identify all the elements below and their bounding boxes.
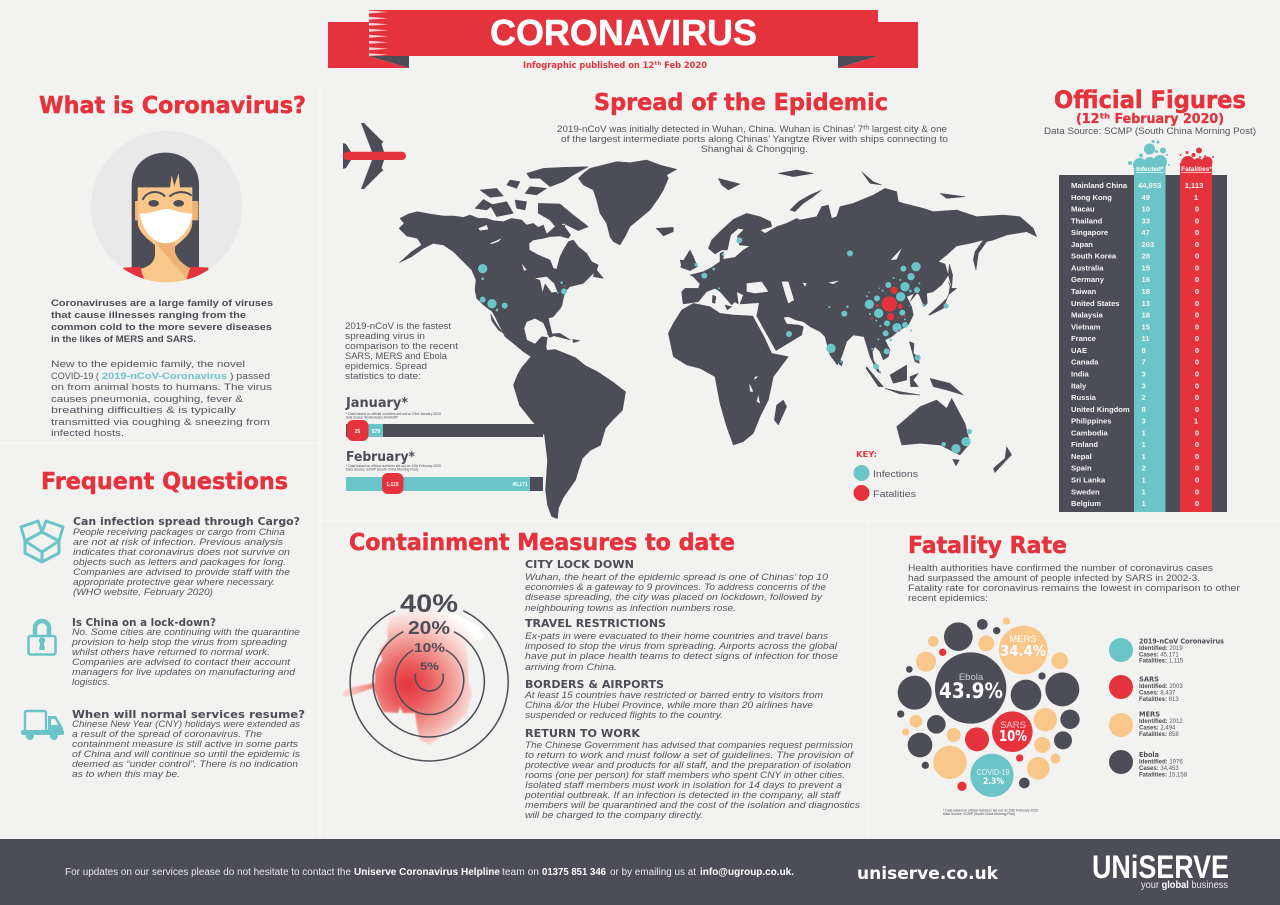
icon: padlock	[28, 621, 56, 654]
contact text	[65, 867, 794, 878]
table: figures by country: Macau	[1071, 205, 1095, 214]
table: figures by country: Mainland China	[1071, 181, 1128, 190]
panel: what is coronavirus	[39, 93, 306, 439]
table: figures by country: 8	[1142, 346, 1146, 355]
table: figures by country: 0	[1195, 240, 1199, 249]
text block: novel virus description: transmitted via coughing & sneezing from	[51, 417, 270, 428]
text block: fatality rate description: recent epidemics:	[908, 593, 988, 604]
heading: frequent questions: Frequent Questions	[41, 469, 288, 495]
table: figures by country: 0	[1195, 275, 1199, 284]
text block: fatality rate description	[908, 563, 1241, 604]
table: figures by country: 0	[1195, 464, 1199, 473]
bubbles: infections	[694, 237, 972, 453]
text block: fastest spreading virus: statistics to date:	[345, 371, 421, 382]
contact text: or by emailing us at	[610, 867, 696, 878]
table: figures by country: 0	[1195, 322, 1199, 331]
text block: bold introduction: that cause illnesses ranging from the	[51, 310, 246, 321]
table: figures by country: Spain	[1071, 464, 1092, 473]
legend: epidemics: Ebola	[1139, 751, 1159, 759]
text block: novel virus description: COVID-19 (	[51, 371, 100, 382]
text block: return to work: will be charged to the company directly.	[525, 810, 703, 821]
table: figures by country: 0	[1195, 381, 1199, 390]
table: figures by country: 15	[1142, 322, 1151, 331]
footer	[0, 839, 1280, 905]
subheading: date: (12ᵗʰ February 2020)	[1076, 112, 1224, 127]
question: lock-down: No. Some cities are continuing with the quarantine	[72, 627, 300, 638]
icon: delivery truck	[21, 711, 64, 740]
text block: bold introduction	[51, 298, 273, 345]
question: lock-down	[71, 617, 300, 688]
table: figures by country: Hong Kong	[1071, 193, 1112, 202]
chart: bubble cluster of fatality rates: * Data based on official numbers set out on 12th February 2020	[943, 808, 1038, 812]
text block: city lock down	[525, 559, 829, 614]
panel: fatality rate	[897, 533, 1241, 816]
table: figures by country: 0	[1195, 346, 1199, 355]
text block: return to work: to return to work and must follow a set of guidelines. The provision of	[525, 750, 854, 761]
table: figures by country: 8	[1142, 405, 1146, 414]
table: figures by country: 15	[1142, 264, 1151, 272]
legend: epidemics: Identified: 2012	[1139, 719, 1183, 725]
bar: february comparison: Data Source: SCMP (South China Morning Post)	[346, 468, 418, 472]
text block: bold introduction: common cold to the more severe diseases	[51, 322, 272, 333]
table: figures by country: Japan	[1071, 240, 1093, 249]
chart: bubble cluster of fatality rates	[897, 617, 1080, 816]
table: figures by country: 0	[1195, 393, 1199, 402]
table: figures by country: 0	[1195, 228, 1199, 237]
question: cargo: Can infection spread through Cargo?	[73, 516, 300, 528]
table: figures by country: 0	[1195, 358, 1199, 367]
table: figures by country: Canada	[1071, 358, 1099, 367]
table: figures by country: 3	[1142, 417, 1146, 426]
text block: return to work: The Chinese Government has advised that companies request permission	[525, 740, 853, 751]
chart: containment rings over china	[343, 590, 508, 761]
table: figures by country: 0	[1195, 370, 1199, 378]
chart: containment rings over china: 5%	[420, 661, 439, 673]
table: figures by country: 0	[1195, 287, 1199, 296]
text block: wuhan introduction: of the largest intermediate ports along Chinas’ Yangtze River with ships connecting to	[561, 134, 948, 145]
text block: fastest spreading virus: comparison to the recent	[345, 341, 458, 352]
chart: bubble cluster of fatality rates: Ebola	[959, 672, 984, 683]
table: figures by country: United Kingdom	[1071, 405, 1130, 414]
legend: epidemics: Cases: 34,453	[1139, 766, 1179, 772]
table: figures by country: Thailand	[1071, 216, 1103, 225]
table: figures by country: Philippines	[1071, 417, 1112, 426]
table: figures by country: UAE	[1071, 346, 1087, 355]
question: cargo: indicates that coronavirus does not survive on	[73, 547, 290, 558]
text block: return to work: protective wear and products for all staff, and the preparation of isolation	[524, 760, 851, 771]
question: lock-down: Is China on a lock-down?	[72, 617, 216, 629]
table: figures by country: 11	[1142, 334, 1150, 343]
text block: travel restrictions: Ex-pats in were evacuated to their home countries and travel bans	[525, 631, 828, 642]
bar: january comparison: 25	[355, 429, 360, 435]
chart: bubble cluster of fatality rates: Data Source: SCMP (South China Morning Post)	[943, 812, 1015, 816]
legend: epidemics: 2019-nCoV Coronavirus	[1139, 638, 1224, 646]
bar: january comparison: Data Source: Worldometers.info/SCMP	[346, 416, 398, 420]
table: figures by country: France	[1071, 334, 1096, 343]
text block: travel restrictions: have put in place health teams to detect signs of infection for those	[525, 651, 838, 662]
question: lock-down: whilst others have returned to normal work.	[72, 647, 270, 658]
logo: your global business	[1141, 880, 1228, 891]
table: figures by country: 3	[1142, 370, 1146, 378]
contact text: Uniserve Coronavirus Helpline	[354, 867, 500, 878]
heading: official figures: Official Figures	[1054, 86, 1246, 114]
bubbles: fatalities	[871, 287, 918, 358]
table: figures by country: 18	[1142, 311, 1150, 320]
table: figures by country: South Korea	[1071, 252, 1117, 261]
text block: borders and airports: At least 15 countries have restricted or barred entry to visitors from	[524, 690, 823, 701]
chart: containment rings over china: 10%	[414, 640, 446, 655]
table: figures by country: Singapore	[1071, 228, 1108, 237]
heading: containment measures: Containment Measures to date	[349, 530, 735, 556]
text block: return to work: RETURN TO WORK	[525, 728, 641, 740]
text block: wuhan introduction: 2019-nCoV was initially detected in Wuhan, China. Wuhan is Chinas’ 7ᵗʰ largest city & one	[557, 124, 947, 135]
illustration: woman wearing a mask	[91, 131, 242, 285]
text block: novel virus description: 2019-nCoV-Coronavirus	[102, 371, 227, 382]
table: figures by country: Sweden	[1071, 487, 1100, 496]
bar: february comparison: February*	[346, 450, 415, 465]
text block: novel virus description: on from animal hosts to humans. The virus	[51, 382, 272, 393]
panel: frequent questions	[21, 469, 305, 780]
table: figures by country: 2	[1142, 393, 1146, 402]
text block: city lock down: neighbouring towns as infection numbers rose.	[525, 603, 736, 614]
table: figures by country: 1	[1142, 499, 1146, 508]
table: figures by country: 47	[1142, 228, 1150, 237]
legend: epidemics: Fatalities: 858	[1139, 732, 1179, 738]
question: cargo: Companies are advised to provide staff with the	[73, 567, 290, 578]
table: figures by country: 0	[1195, 205, 1199, 214]
legend: epidemics: Identified: 2003	[1139, 684, 1183, 690]
legend: epidemics: Cases: 8,437	[1139, 690, 1176, 696]
heading: fatality rate: Fatality Rate	[908, 533, 1067, 559]
panel: containment measures	[343, 530, 860, 821]
text block: return to work: Isolated staff members must work in isolation for 14 days to prevent a	[525, 780, 842, 791]
table: figures by country: 33	[1142, 216, 1150, 225]
table: figures by country: Malaysia	[1071, 311, 1103, 320]
text block: travel restrictions: arriving from China.	[525, 662, 617, 673]
title banner	[328, 10, 918, 71]
table: figures by country: 1	[1142, 487, 1146, 496]
legend: epidemics: MERS	[1139, 710, 1160, 718]
question: cargo: appropriate protective gear where necessary.	[73, 577, 275, 588]
table: figures by country: Finland	[1071, 440, 1098, 449]
table: figures by country: 13	[1142, 299, 1150, 308]
table: figures by country: 16	[1142, 275, 1150, 284]
map key: Infections	[873, 469, 918, 480]
table: figures by country: 49	[1142, 193, 1150, 202]
table: figures by country: 0	[1195, 452, 1199, 461]
table: figures by country: Cambodia	[1071, 428, 1108, 437]
table: figures by country: Russia	[1071, 393, 1097, 402]
chart: bubble cluster of fatality rates: COVID-19	[976, 767, 1010, 777]
table: figures by country: 0	[1195, 405, 1199, 414]
table: figures by country: 10	[1142, 205, 1150, 214]
legend: epidemics: Identified: 2019	[1139, 646, 1183, 652]
icon: infected bubbles	[1128, 140, 1170, 172]
table: figures by country: United States	[1071, 299, 1120, 308]
table: figures by country: Australia	[1071, 264, 1104, 272]
text block: wuhan introduction: Shanghai & Chongqing.	[701, 144, 808, 155]
bar: january comparison: 579	[372, 429, 380, 435]
table: figures by country: 1	[1142, 452, 1146, 461]
table: figures by country: 44,653	[1138, 181, 1161, 190]
text block: return to work: potential outbreak. If an infection is detected in the company, all staff	[524, 790, 841, 801]
question: lock-down: managers for live updates on manufacturing and	[72, 667, 296, 678]
table: figures by country: Nepal	[1071, 452, 1092, 461]
map: north america and greenland	[399, 160, 677, 360]
text block: bold introduction: Coronaviruses are a large family of viruses	[51, 298, 273, 309]
text block: borders and airports	[524, 679, 823, 721]
text block: novel virus description: infected hosts.	[51, 428, 124, 439]
chart: bubble cluster of fatality rates: 10%	[999, 727, 1027, 745]
question: services resume: deemed as “under control”. There is no indication	[72, 759, 298, 770]
text block: travel restrictions: TRAVEL RESTRICTIONS	[525, 618, 666, 630]
text block: novel virus description	[51, 359, 272, 439]
text block: fatality rate description: Health authorities have confirmed the number of coronavirus cases	[908, 563, 1213, 574]
data source: Data Source: SCMP (South China Morning Post)	[1044, 126, 1256, 137]
bar: january comparison	[345, 396, 543, 441]
chart: containment rings over china: 20%	[408, 618, 450, 638]
table: figures by country: 0	[1195, 499, 1199, 508]
table: figures by country	[1059, 140, 1227, 512]
table: figures by country: Taiwan	[1071, 287, 1097, 296]
icon: airplane	[343, 123, 406, 189]
text block: novel virus description: ) passed	[230, 371, 270, 382]
table: figures by country: 0	[1195, 264, 1199, 272]
contact text: For updates on our services please do not hesitate to contact the	[65, 867, 351, 878]
text block: city lock down: disease spreading, the city was placed on lockdown, followed by	[525, 592, 823, 603]
table: figures by country: 0	[1195, 252, 1199, 261]
table: figures by country: Germany	[1071, 275, 1105, 284]
contact text: info@ugroup.co.uk.	[700, 867, 794, 878]
map key: KEY:	[856, 450, 877, 459]
bar: february comparison: 1,115	[386, 482, 399, 488]
text block: wuhan introduction	[557, 124, 948, 155]
bubbles: north america infections	[478, 264, 567, 311]
text block: city lock down: Wuhan, the heart of the epidemic spread is one of Chinas’ top 10	[525, 572, 829, 583]
text block: return to work: rooms (one per person) for staff members who spent CNY in other cities.	[525, 770, 845, 781]
text block: fastest spreading virus	[345, 321, 458, 382]
text block: city lock down: CITY LOCK DOWN	[525, 559, 634, 571]
text block: borders and airports: suspended or reduced flights to the country.	[525, 710, 723, 721]
legend: epidemics: Cases: 45,171	[1139, 652, 1179, 658]
text block: fastest spreading virus: 2019-nCoV is the fastest	[345, 321, 451, 332]
text block: bold introduction: in the likes of MERS and SARS.	[51, 334, 196, 345]
icon: fatality bubbles	[1180, 148, 1214, 170]
table: figures by country: 28	[1142, 252, 1150, 261]
legend: epidemics: Fatalities: 15,158	[1139, 772, 1188, 778]
chart: bubble cluster of fatality rates: MERS	[1009, 634, 1037, 645]
question: services resume: as to when this may be.	[72, 769, 180, 780]
table: figures by country: 1	[1142, 428, 1146, 437]
table: figures by country: Fatalities*	[1181, 166, 1212, 173]
bar: january comparison: * Data based on official numbers set out on 23rd January 2020	[346, 412, 441, 416]
bar: january comparison: January*	[345, 396, 408, 411]
text block: novel virus description: New to the epidemic family, the novel	[51, 359, 245, 370]
text block: novel virus description: causes pneumonia, coughing, fever &	[51, 394, 244, 405]
question: lock-down: logistics.	[72, 677, 110, 688]
bar: february comparison	[346, 450, 543, 494]
table: figures by country: Italy	[1071, 381, 1087, 390]
question: services resume: Chinese New Year (CNY) holidays were extended as	[72, 719, 300, 730]
contact text: team on	[502, 867, 539, 878]
text block: travel restrictions: imposed to stop the virus from spreading. Airports across the global	[525, 641, 838, 652]
table: figures by country: Sri Lanka	[1071, 476, 1106, 484]
world map	[399, 160, 1037, 518]
question: cargo: People receiving packages or cargo from China	[73, 527, 285, 538]
table: figures by country: 0	[1195, 299, 1199, 308]
table: figures by country: 3	[1142, 381, 1146, 390]
table: figures by country: Vietnam	[1071, 322, 1101, 331]
legend: epidemics: Cases: 2,494	[1139, 726, 1176, 732]
legend: epidemics: Fatalities: 1,115	[1139, 658, 1184, 664]
legend: epidemics: Identified: 1976	[1139, 760, 1183, 766]
question: lock-down: provision to help stop the virus from spreading	[71, 637, 288, 648]
heading: spread of the epidemic: Spread of the Epidemic	[594, 90, 888, 116]
question: lock-down: Companies are advised to contact their account	[72, 657, 290, 668]
text block: city lock down: economies & a gateway to 9 provinces. To address concerns of the	[525, 582, 826, 593]
chart: bubble cluster of fatality rates: 43.9%	[939, 679, 1003, 703]
title banner: CORONAVIRUS	[490, 12, 757, 53]
panel: spread of the epidemic	[343, 90, 1037, 518]
table: figures by country: 1	[1142, 476, 1146, 484]
question: services resume: When will normal services resume?	[72, 709, 305, 721]
chart: bubble cluster of fatality rates: 34.4%	[1000, 642, 1046, 660]
question: services resume	[72, 709, 305, 780]
panel: official figures	[1044, 86, 1256, 512]
text block: borders and airports: China &/or the Hubei Province, while more than 20 airlines have	[525, 700, 813, 711]
map: eurasia, africa and oceania	[656, 170, 1037, 473]
text block: return to work	[524, 728, 860, 821]
chart: bubble cluster of fatality rates: SARS	[1000, 720, 1026, 731]
table: figures by country: 7	[1142, 358, 1146, 367]
legend: epidemics	[1109, 638, 1224, 778]
map key: Fatalities	[873, 489, 916, 500]
table: figures by country: 1	[1194, 193, 1199, 202]
text block: novel virus description: breathing difficulties & is typically	[51, 405, 236, 416]
table: figures by country: India	[1071, 370, 1089, 378]
map key	[854, 450, 918, 501]
legend: epidemics: Fatalities: 813	[1139, 697, 1179, 703]
chart: bubble cluster of fatality rates: 2.3%	[983, 777, 1004, 787]
map: south america	[514, 350, 625, 518]
question: services resume: a result of the spread of coronavirus. The	[72, 729, 262, 740]
legend: epidemics: SARS	[1139, 676, 1159, 684]
question: services resume: of China and will continue so until the epidemic is	[72, 749, 300, 760]
table: figures by country: 0	[1195, 476, 1199, 484]
title banner: Infographic published on 12ᵗʰ Feb 2020	[523, 61, 707, 71]
bar: february comparison: * Data based on official numbers set out on 12th February 2020	[346, 464, 441, 468]
table: figures by country: 0	[1195, 216, 1199, 225]
text block: borders and airports: BORDERS & AIRPORTS	[525, 679, 664, 691]
contact text: 01375 851 346	[542, 867, 606, 878]
table: figures by country: 0	[1195, 334, 1199, 343]
logo: UNiSERVE	[1092, 849, 1229, 885]
table: figures by country: 203	[1142, 240, 1154, 249]
table: figures by country: 0	[1195, 487, 1199, 496]
chart: containment rings over china: 40%	[400, 590, 458, 618]
question: cargo	[73, 516, 300, 598]
question: cargo: objects such as letters and packages for long.	[73, 557, 286, 568]
question: cargo: (WHO website, February 2020)	[73, 587, 213, 598]
table: figures by country: 2	[1142, 464, 1146, 473]
question: cargo: are not at risk of infection. Previous analysis	[73, 537, 283, 548]
text block: travel restrictions	[525, 618, 838, 673]
table: figures by country: 18	[1142, 287, 1150, 296]
table: figures by country: Infected*	[1136, 166, 1164, 173]
table: figures by country: 1,113	[1185, 181, 1203, 190]
table: figures by country: Belgium	[1071, 499, 1101, 508]
table: figures by country: 0	[1195, 428, 1199, 437]
text block: fastest spreading virus: spreading virus in	[345, 331, 425, 342]
table: figures by country: 0	[1195, 440, 1199, 449]
table: figures by country: 1	[1194, 417, 1199, 426]
website: uniserve.co.uk	[857, 864, 999, 884]
heading: what is coronavirus: What is Coronavirus?	[39, 93, 306, 119]
text block: fastest spreading virus: epidemics. Spread	[345, 361, 427, 372]
icon: open box	[21, 521, 63, 562]
table: figures by country: 1	[1142, 440, 1146, 449]
bar: february comparison: 45,171	[512, 482, 528, 488]
question: services resume: containment measure is still active in some parts	[72, 739, 298, 750]
text block: fatality rate description: Fatality rate for coronavirus remains the lowest in comparison to other	[908, 583, 1241, 594]
text block: fatality rate description: had surpassed the amount of people infected by SARS in 2002-3.	[908, 573, 1200, 584]
text block: fastest spreading virus: SARS, MERS and Ebola	[345, 351, 448, 362]
text block: return to work: members will be quarantined and the cost of the isolation and diagnostics	[525, 800, 860, 811]
table: figures by country: 0	[1195, 311, 1199, 320]
